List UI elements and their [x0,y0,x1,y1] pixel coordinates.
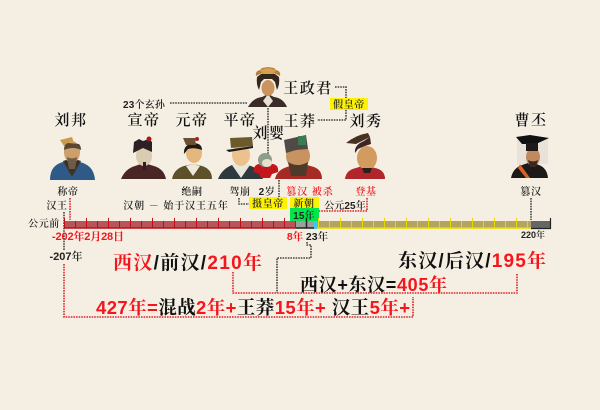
label: regent emperor: 摄皇帝 [252,197,284,210]
heading: Western Han 210 years: 西汉/前汉/210年 [113,251,262,274]
label: 23 great-great-grandsons: 23个玄孙 [123,98,166,111]
label: line continues: 绝嗣 [181,185,203,198]
segment: transition [314,221,317,229]
label: died: 驾崩 [229,185,251,198]
connector: died to regent [239,198,250,204]
heading: Liu Bang: 刘邦 [54,111,88,129]
heading: Western plus Eastern Han 405 years: 西汉+东汉=405年 [300,274,447,295]
connector: King of Han to 207 BC [63,212,65,250]
connector: Cao Pi to timeline [530,198,532,220]
connector: Western Han span [233,272,517,293]
connector: false emperor bracket [317,87,346,120]
heading: Wang Zhengjun: 王政君 [283,80,333,97]
icon: portrait Pingdi [218,137,263,179]
segment: Western Han [64,221,296,228]
label: enthronement: 登基 [355,185,377,198]
icon: portrait Wang Zhengjun [248,67,287,107]
label: 207 BC: -207年 [49,249,83,263]
label: dynasty start note: 汉朝 － 始于汉王五年 [123,199,229,212]
heading: Liu Ying: 刘婴 [252,124,286,142]
label: 220 AD: 220年 [521,229,545,240]
connector: claims emperor to timeline [69,198,71,220]
heading: Pingdi: 平帝 [223,112,257,129]
segment: Eastern Han [317,221,531,228]
label: Xin dynasty: 新朝 [293,197,315,210]
icon: portrait Wang Mang [275,135,322,179]
label: 202 BC date: -202年2月28日 [52,229,124,243]
heading: Eastern Han 195 years: 东汉/后汉/195年 [398,249,546,272]
label: usurps Han and killed: 篡汉 被杀 [286,185,334,198]
connector: Liu Ying to Ruzi regency [278,180,280,198]
label: false emperor: 假皇帝 [333,98,365,111]
icon: portrait Liu Bang [50,137,95,180]
timeline bar [64,218,550,229]
segment: Three Kingdoms start [531,221,550,228]
heading: Cao Pi: 曹丕 [514,111,548,129]
heading: Liu Xiu: 刘秀 [349,112,383,130]
heading: 427 years formula: 427年=混战2年+王莽15年+ 汉王5年+ [96,297,410,318]
segment: Xin dynasty [296,221,314,228]
label: Xin dynasty [290,197,319,210]
icon: portrait Yuandi [172,137,212,179]
label: age 2: 2岁 [259,185,275,198]
icon: portrait Xuandi [121,136,166,179]
label: BC: 公元前 [28,217,60,230]
label: 15 years [290,208,319,222]
icon: portrait Liu Ying baby [254,153,278,178]
label: AD 25: 公元25年 [324,199,366,212]
heading: Wang Mang: 王莽 [283,112,317,130]
heading: Xuandi: 宣帝 [127,112,161,129]
label: 23 AD: 23年 [306,230,329,243]
label: 8 AD: 8年 [287,230,304,243]
connector: outer total bracket [64,264,413,317]
heading: Yuandi: 元帝 [175,112,209,129]
label: claims emperor: 称帝 [57,185,79,198]
icon: portrait Liu Xiu [345,133,385,179]
label: usurps Han, Cao Pi: 篡汉 [520,185,542,198]
connector: Wang Zhengjun to Xuandi [170,102,248,104]
label: King of Han: 汉王 [46,200,68,212]
connector: AD 25 red bracket [318,198,367,211]
icon: portrait Cao Pi [511,135,549,178]
connector: Wang Zhengjun to Liu Ying [267,108,269,158]
connector: 23 AD to total [277,242,311,293]
label: 15 years: 15年 [293,209,315,222]
